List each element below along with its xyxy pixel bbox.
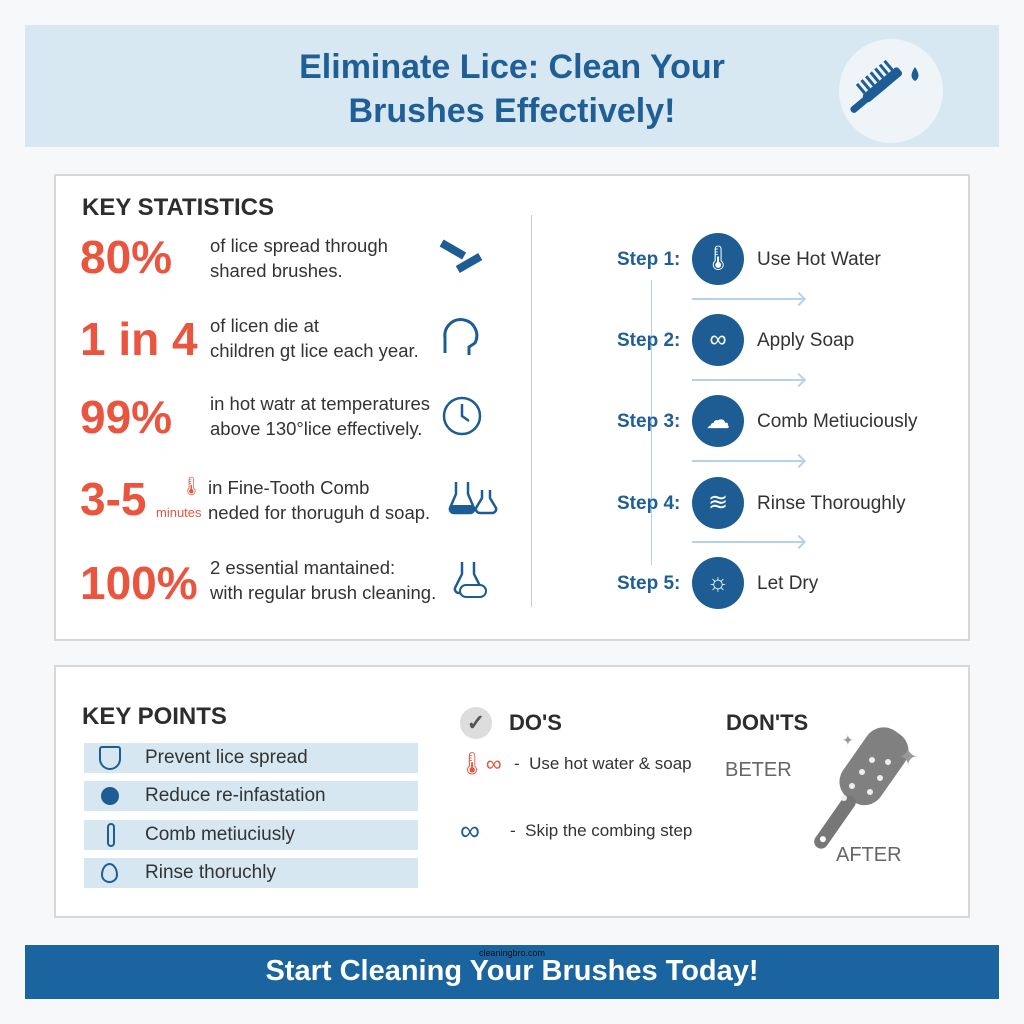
panel: key points <box>54 665 970 918</box>
heading: key statistics: KEY STATISTICS <box>82 194 274 221</box>
key point rows <box>84 743 418 888</box>
don'ts: DON'TS <box>726 710 808 735</box>
stat 5 <box>80 557 487 609</box>
stat 3: above 130°lice effectively. <box>210 418 422 439</box>
do's: ∞ <box>460 815 480 846</box>
don'ts: BETER <box>725 759 792 781</box>
footer band <box>25 945 999 999</box>
stat 3 <box>80 391 482 443</box>
do's: 🌡︎∞ <box>458 751 502 776</box>
icon: brush <box>814 727 918 849</box>
step 2: Apply Soap <box>757 330 854 351</box>
key point rows: Comb metiuciusly <box>145 824 295 845</box>
step 2 <box>617 314 854 366</box>
icon: brush: ✦ <box>842 732 854 748</box>
stat 3: 99% <box>80 391 172 443</box>
icon: flasks <box>448 482 498 514</box>
footer band: cleaningbro.com <box>479 948 545 958</box>
stat 3: in hot watr at temperatures <box>210 393 430 414</box>
step 4: Rinse Thoroughly <box>757 493 906 514</box>
stat 5: 2 essential mantained: <box>210 557 395 578</box>
icon: brush: ✦ <box>898 744 918 771</box>
panel: statistics and steps <box>54 174 970 641</box>
step 4 <box>617 477 906 529</box>
don'ts: AFTER <box>836 844 902 866</box>
do's: ✓ <box>467 710 485 735</box>
stat 4: 3-5 <box>80 473 146 525</box>
do's: - Skip the combing step <box>510 821 692 840</box>
step 5: Step 5: <box>617 573 680 594</box>
header band <box>25 25 999 147</box>
stat 4: 🌡︎ <box>180 476 203 496</box>
don'ts <box>725 710 918 866</box>
step 1: Step 1: <box>617 249 680 270</box>
key point rows: Reduce re-infastation <box>145 785 326 806</box>
step 2: Step 2: <box>617 330 680 351</box>
stat 1 <box>80 231 482 283</box>
stat 2: 1 in 4 <box>80 313 198 365</box>
step 5 <box>617 557 818 609</box>
stat 1: 80% <box>80 231 172 283</box>
key point rows: Prevent lice spread <box>145 747 308 768</box>
key point rows: Rinse thoruchly <box>145 862 276 883</box>
steps timeline <box>651 280 652 565</box>
step 3: Step 3: <box>617 411 680 432</box>
heading: key points: KEY POINTS <box>82 703 227 730</box>
stat 2: children gt lice each year. <box>210 340 419 361</box>
stat 4: in Fine-Tooth Comb <box>208 477 369 498</box>
icon: head <box>443 318 478 355</box>
stat 4 <box>80 473 498 525</box>
stat 2 <box>80 313 478 365</box>
stat 4: neded for thoruguh d soap. <box>208 502 430 523</box>
step 1: 🌡︎ <box>703 245 733 272</box>
step 4: ≋ <box>708 489 728 516</box>
step 3: ☁ <box>706 407 730 434</box>
do's: DO'S <box>509 710 562 735</box>
title <box>299 48 725 130</box>
step 1 <box>617 233 881 285</box>
stat 1: shared brushes. <box>210 260 343 281</box>
stat 1: of lice spread through <box>210 235 388 256</box>
step 2: ∞ <box>709 326 727 353</box>
icon: comb and drop <box>839 39 943 143</box>
stat 5: 100% <box>80 557 198 609</box>
icon: brushes <box>440 240 482 273</box>
stat 4: minutes <box>156 505 202 520</box>
title: Brushes Effectively! <box>349 92 675 130</box>
step 3 <box>617 395 918 447</box>
stat 2: of licen die at <box>210 315 319 336</box>
step 1: Use Hot Water <box>757 249 881 270</box>
footer text: Start Cleaning Your Brushes Today! <box>265 955 759 987</box>
title: Eliminate Lice: Clean Your <box>299 48 725 86</box>
icon: clock <box>442 396 482 436</box>
step 5: Let Dry <box>757 573 818 594</box>
do's: - Use hot water & soap <box>514 754 692 773</box>
do's <box>458 707 692 846</box>
step 4: Step 4: <box>617 493 680 514</box>
icon: soap flask <box>454 562 487 598</box>
stat 5: with regular brush cleaning. <box>210 582 436 603</box>
step 3: Comb Metiuciously <box>757 411 918 432</box>
step 5: ☼ <box>707 569 729 596</box>
